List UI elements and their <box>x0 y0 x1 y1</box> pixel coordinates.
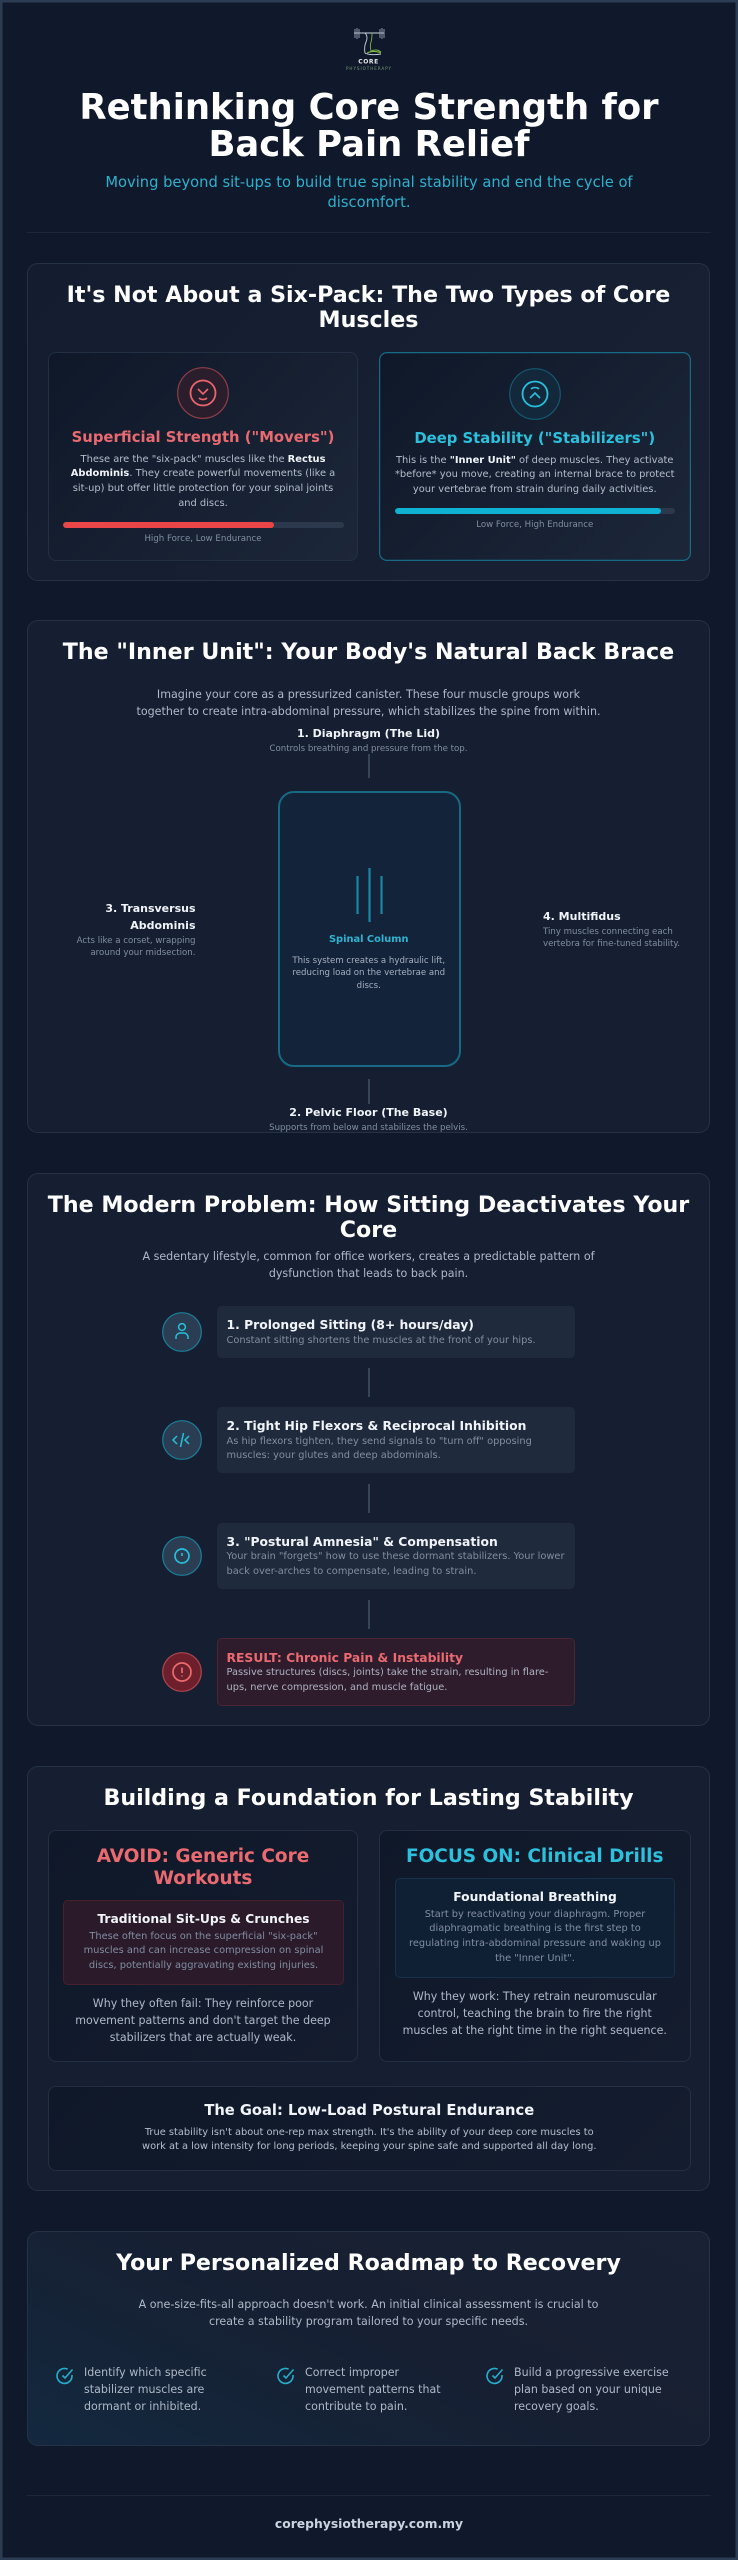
spine icon <box>356 868 383 922</box>
canister text: discs. <box>357 981 381 991</box>
arrow connector 1 <box>368 1368 370 1397</box>
footer <box>27 2495 711 2545</box>
label: transversus abdominis: 3. Transversus <box>105 902 196 914</box>
subtitle: discomfort. <box>327 194 411 210</box>
footer url: corephysiotherapy.com.my <box>275 2517 463 2531</box>
goal title: The Goal: Low-Load Postural Endurance <box>204 2102 534 2119</box>
connector top <box>368 754 370 778</box>
arrow connector 2 <box>368 1484 370 1513</box>
step title: 2. Tight Hip Flexors & Reciprocal Inhibition <box>226 1418 526 1432</box>
card text: *before* you move, creating an internal brace to protect <box>395 469 675 480</box>
goal text <box>142 2126 596 2152</box>
label: pelvic floor <box>269 1106 468 1133</box>
step 2 <box>216 1407 575 1473</box>
box text <box>84 1930 323 1971</box>
heading: Your Personalized Roadmap to Recovery <box>116 2250 621 2276</box>
step text: As hip flexors tighten, they send signals to "turn off" opposing <box>226 1436 532 1446</box>
intro: create a stability program tailored to your specific needs. <box>209 2315 528 2328</box>
why text <box>75 1996 331 2044</box>
card: deep stability <box>379 352 690 561</box>
box text: discs, potentially aggravating existing injuries. <box>89 1960 318 1971</box>
heading <box>48 1192 690 1242</box>
icon: check <box>486 2368 503 2384</box>
card text: your vertebrae from strain during daily activities. <box>413 484 657 495</box>
title: Rethinking Core Strength for <box>79 86 659 128</box>
item text: dormant or inhibited. <box>84 2400 201 2413</box>
card title: Superficial Strength ("Movers") <box>72 429 334 446</box>
arrow connector 3 <box>368 1600 370 1629</box>
heading: The "Inner Unit": Your Body's Natural Back Brace <box>63 639 674 665</box>
why text: control, teaching the brain to fire the right <box>418 2007 652 2020</box>
item text <box>305 2366 441 2413</box>
card title: Deep Stability ("Stabilizers") <box>414 430 655 447</box>
label: multifidus <box>543 910 680 949</box>
spine label: Spinal Column <box>329 934 409 944</box>
connector bottom <box>368 1079 370 1104</box>
logo sub text: PHYSIOTHERAPY <box>346 66 392 70</box>
intro <box>142 1250 595 1280</box>
header <box>27 28 711 233</box>
item 3 <box>486 2366 669 2413</box>
icon: code <box>162 1420 202 1460</box>
panel: foundation <box>27 1766 710 2191</box>
box text: the "Inner Unit". <box>495 1953 575 1964</box>
step 3 <box>216 1523 575 1589</box>
heading <box>67 282 670 332</box>
card: avoid <box>48 1830 358 2062</box>
panel: roadmap <box>27 2231 710 2446</box>
icon: alert <box>162 1652 202 1692</box>
icon: chevrons up <box>509 368 561 420</box>
icon: clock <box>162 1536 202 1576</box>
why text <box>403 1990 667 2037</box>
step title: 3. "Postural Amnesia" & Compensation <box>226 1534 498 1548</box>
item text: Correct improper <box>305 2366 399 2379</box>
item text: plan based on your unique <box>514 2383 662 2396</box>
step title: 1. Prolonged Sitting (8+ hours/day) <box>226 1318 474 1332</box>
label: diaphragm <box>270 726 467 754</box>
result box <box>216 1638 575 1706</box>
title <box>79 86 659 164</box>
card text <box>70 454 335 509</box>
why text: muscles at the right time in the right sequence. <box>403 2024 667 2037</box>
logo: CORE <box>358 58 379 66</box>
step text: Constant sitting shortens the muscles at the front of your hips. <box>226 1334 536 1346</box>
box text: diaphragmatic breathing is the first step to <box>429 1923 641 1934</box>
force bar <box>63 522 344 528</box>
canister diagram <box>278 791 461 1067</box>
heading: Muscles <box>319 306 418 332</box>
result text <box>226 1667 548 1693</box>
card: goal <box>48 2086 690 2171</box>
label: transversus abdominis: Acts like a corset, wrapping <box>77 936 196 946</box>
item text <box>514 2364 669 2416</box>
step text <box>226 1551 564 1577</box>
box text <box>409 1908 661 1964</box>
divider <box>27 232 711 233</box>
card text: and discs. <box>178 498 228 509</box>
box title: Foundational Breathing <box>453 1890 617 1904</box>
intro: dysfunction that leads to back pain. <box>269 1267 468 1280</box>
box text: Start by reactivating your diaphragm. Proper <box>425 1908 645 1920</box>
icon: check <box>277 2368 294 2384</box>
canister text: This system creates a hydraulic lift, <box>292 956 445 966</box>
step text: muscles: your glutes and deep abdominals. <box>226 1450 441 1461</box>
panel: modern problem <box>27 1173 710 1726</box>
canister text <box>292 956 445 991</box>
box text: muscles and can increase compression on spinal <box>84 1945 323 1956</box>
icon: person <box>162 1312 202 1352</box>
item 1 <box>56 2366 207 2413</box>
box text: These often focus on the superficial "six-pack" <box>89 1930 318 1942</box>
box text: regulating intra-abdominal pressure and waking up <box>409 1938 661 1949</box>
label: diaphragm: 1. Diaphragm (The Lid) <box>297 726 440 740</box>
avoid title: Workouts <box>154 1868 252 1889</box>
label: multifidus: vertebra for fine-tuned stability. <box>543 939 680 949</box>
item text: Identify which specific <box>84 2366 207 2379</box>
label: transversus abdominis <box>76 902 196 958</box>
heading: Building a Foundation for Lasting Stability <box>103 1784 634 1810</box>
intro <box>138 2298 598 2328</box>
item text: contribute to pain. <box>305 2400 407 2413</box>
label: pelvic floor: Supports from below and stabilizes the pelvis. <box>269 1123 468 1133</box>
label: pelvic floor: 2. Pelvic Floor (The Base) <box>289 1106 448 1118</box>
result text: Passive structures (discs, joints) take the strain, resulting in flare- <box>226 1667 548 1678</box>
card: focus <box>379 1830 690 2062</box>
card text: Abdominis. They create powerful movements (like a <box>71 468 335 479</box>
canister text: reducing load on the vertebrae and <box>292 968 445 978</box>
item text <box>84 2366 207 2413</box>
why text: movement patterns and don't target the deep <box>75 2014 331 2027</box>
icon: chevrons down <box>177 367 229 419</box>
why text: Why they work: They retrain neuromuscular <box>413 1990 657 2002</box>
step text: back over-arches to compensate, leading to strain. <box>226 1566 476 1577</box>
step text <box>226 1436 532 1461</box>
result text: ups, nerve compression, and muscle fatigue. <box>226 1682 447 1693</box>
box title: Traditional Sit-Ups & Crunches <box>97 1912 310 1926</box>
card text: sit-up) but offer little protection for your spinal joints <box>73 483 333 494</box>
step 1 <box>216 1306 575 1358</box>
card text: This is the "Inner Unit" of deep muscles. They activate <box>396 455 674 466</box>
intro: Imagine your core as a pressurized canister. These four muscle groups work <box>157 688 580 700</box>
intro: together to create intra-abdominal pressure, which stabilizes the spine from within. <box>136 705 601 718</box>
item text: Build a progressive exercise <box>514 2366 669 2379</box>
result title: RESULT: Chronic Pain & Instability <box>226 1650 463 1664</box>
label: transversus abdominis: Abdominis <box>130 918 196 932</box>
red box: sit-ups <box>63 1900 344 1985</box>
item 2 <box>277 2366 441 2413</box>
label: diaphragm: Controls breathing and pressure from the top. <box>270 744 467 754</box>
step text: Your brain "forgets" how to use these dormant stabilizers. Your lower <box>226 1551 564 1562</box>
why text: Why they often fail: They reinforce poor <box>93 1996 313 2010</box>
item text: movement patterns that <box>305 2383 441 2396</box>
card text <box>395 455 675 495</box>
subtitle: Moving beyond sit-ups to build true spinal stability and end the cycle of <box>105 174 633 191</box>
card: superficial strength <box>48 352 358 561</box>
avoid title <box>96 1846 309 1889</box>
icon: check <box>56 2368 73 2384</box>
label: multifidus: Tiny muscles connecting each <box>543 927 673 937</box>
stability bar <box>395 508 675 514</box>
card text: These are the "six-pack" muscles like the Rectus <box>81 454 325 465</box>
heading: It's Not About a Six-Pack: The Two Types of Core <box>67 282 670 308</box>
label: multifidus: 4. Multifidus <box>543 910 621 922</box>
heading: The Modern Problem: How Sitting Deactivates Your <box>48 1192 689 1218</box>
label: transversus abdominis: around your midsection. <box>90 948 196 958</box>
title: Back Pain Relief <box>208 124 530 164</box>
blue box: breathing <box>395 1878 675 1978</box>
focus title: FOCUS ON: Clinical Drills <box>406 1846 663 1867</box>
why text: stabilizers that are actually weak. <box>110 2031 296 2044</box>
panel: inner unit <box>27 620 710 1133</box>
intro: A sedentary lifestyle, common for office workers, creates a predictable pattern of <box>142 1250 595 1262</box>
logo <box>354 28 384 66</box>
goal text: work at a low intensity for long periods, keeping your spine safe and supported all day long. <box>142 2141 596 2152</box>
subtitle <box>105 174 633 210</box>
item text: stabilizer muscles are <box>84 2383 204 2396</box>
goal text: True stability isn't about one-rep max strength. It's the ability of your deep core muscles to <box>145 2126 594 2138</box>
avoid title: AVOID: Generic Core <box>97 1846 309 1867</box>
bar label: Low Force, High Endurance <box>476 520 593 530</box>
panel: two types of core muscles <box>27 263 710 581</box>
intro <box>136 688 601 718</box>
bar label: High Force, Low Endurance <box>144 534 262 544</box>
heading: Core <box>340 1216 397 1242</box>
item text: recovery goals. <box>514 2400 599 2413</box>
intro: A one-size-fits-all approach doesn't work. An initial clinical assessment is crucial to <box>139 2298 598 2310</box>
